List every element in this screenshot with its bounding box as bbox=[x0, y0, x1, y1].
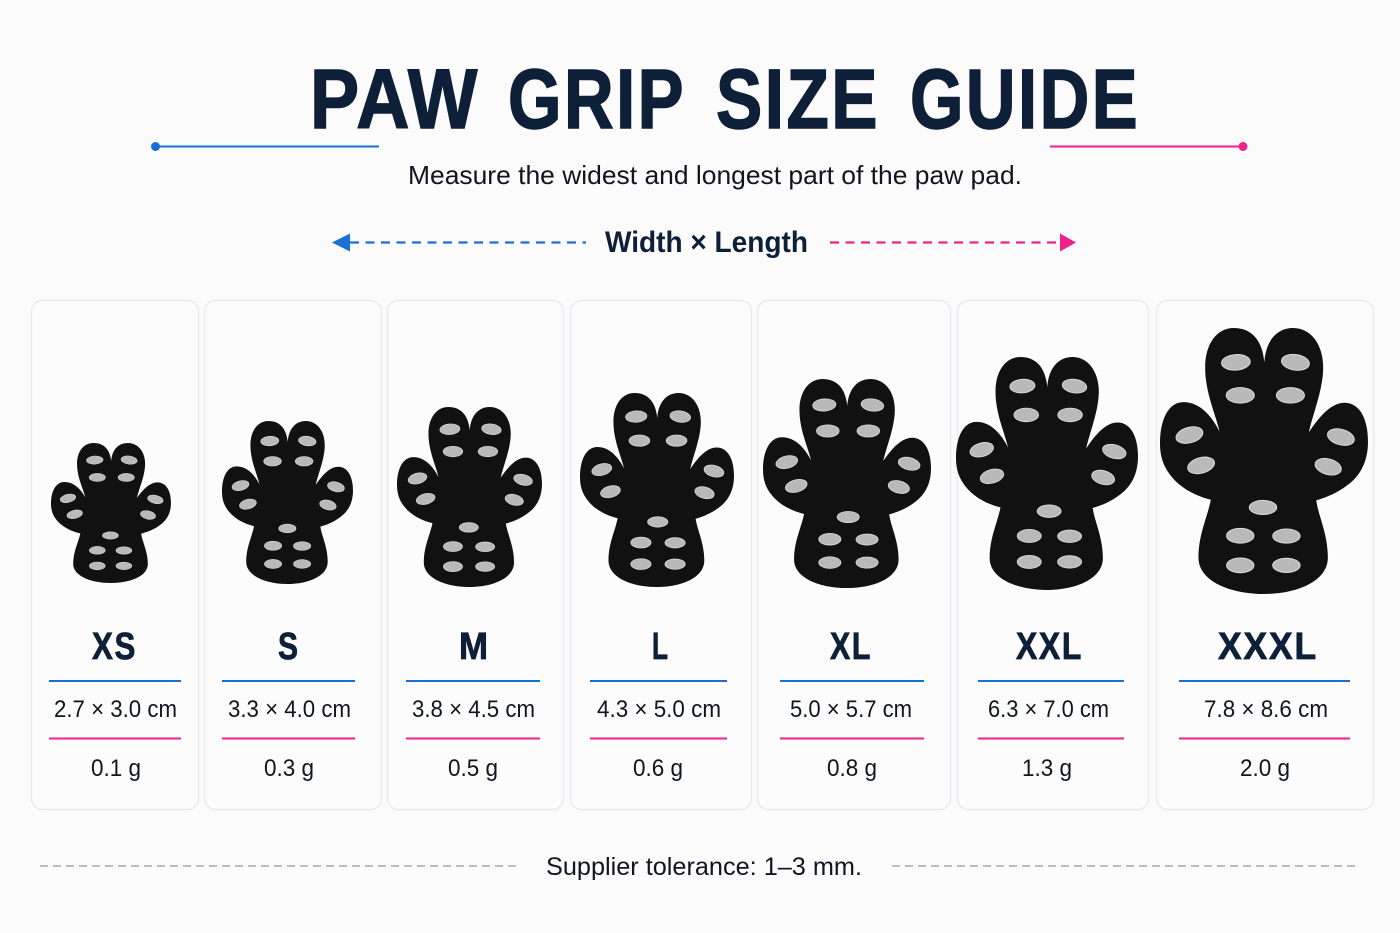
title: SIZE bbox=[716, 52, 880, 146]
dimensions S: 3.3 × 4.0 cm bbox=[228, 696, 351, 723]
title accent: blue line with dot bbox=[151, 142, 379, 151]
panel: size XS bbox=[32, 300, 198, 810]
weight S: 0.3 g bbox=[264, 755, 314, 782]
title: PAW bbox=[310, 52, 480, 146]
label XXL: XXL bbox=[1016, 626, 1083, 668]
panel: size XXXL bbox=[1156, 300, 1374, 810]
title: GRIP bbox=[508, 52, 686, 146]
panel: size L bbox=[570, 300, 752, 810]
dimensions XXL: 6.3 × 7.0 cm bbox=[988, 696, 1109, 723]
footer note: Supplier tolerance: 1–3 mm. bbox=[546, 853, 862, 881]
arrow: length, pink dashed right bbox=[830, 234, 1076, 252]
paw pad XXL bbox=[956, 357, 1138, 590]
label XL: XL bbox=[830, 626, 872, 668]
dimensions XS: 2.7 × 3.0 cm bbox=[54, 696, 177, 723]
arrow: width, blue dashed left bbox=[332, 234, 586, 252]
label XS: XS bbox=[92, 626, 137, 668]
weight XL: 0.8 g bbox=[827, 755, 877, 782]
panel: size M bbox=[388, 300, 564, 810]
subtitle: Measure the widest and longest part of the paw pad. bbox=[408, 160, 1022, 190]
paw pad S bbox=[222, 421, 353, 584]
title accent: pink line with dot bbox=[1050, 142, 1248, 151]
title bbox=[310, 52, 1140, 146]
panel: size XL bbox=[758, 300, 950, 810]
label M: M bbox=[459, 626, 488, 668]
panel: size S bbox=[204, 300, 382, 810]
weight XXXL: 2.0 g bbox=[1240, 755, 1290, 782]
paw pad M bbox=[397, 407, 542, 587]
label XXXL: XXXL bbox=[1218, 626, 1318, 668]
dimensions XXXL: 7.8 × 8.6 cm bbox=[1204, 696, 1328, 723]
measurement label: Width × Length bbox=[605, 226, 808, 259]
weight M: 0.5 g bbox=[448, 755, 498, 782]
panel: size XXL bbox=[956, 300, 1148, 810]
title: GUIDE bbox=[910, 52, 1140, 146]
paw pad L bbox=[580, 393, 734, 587]
label L: L bbox=[652, 626, 668, 668]
dimensions M: 3.8 × 4.5 cm bbox=[412, 696, 535, 723]
weight L: 0.6 g bbox=[633, 755, 683, 782]
dimensions L: 4.3 × 5.0 cm bbox=[597, 696, 721, 723]
weight XS: 0.1 g bbox=[91, 755, 141, 782]
weight XXL: 1.3 g bbox=[1022, 755, 1072, 782]
dimensions XL: 5.0 × 5.7 cm bbox=[790, 696, 912, 723]
paw pad XL bbox=[763, 379, 931, 588]
label S: S bbox=[278, 626, 298, 668]
paw pad XS bbox=[51, 443, 171, 583]
paw pad XXXL bbox=[1160, 328, 1368, 594]
